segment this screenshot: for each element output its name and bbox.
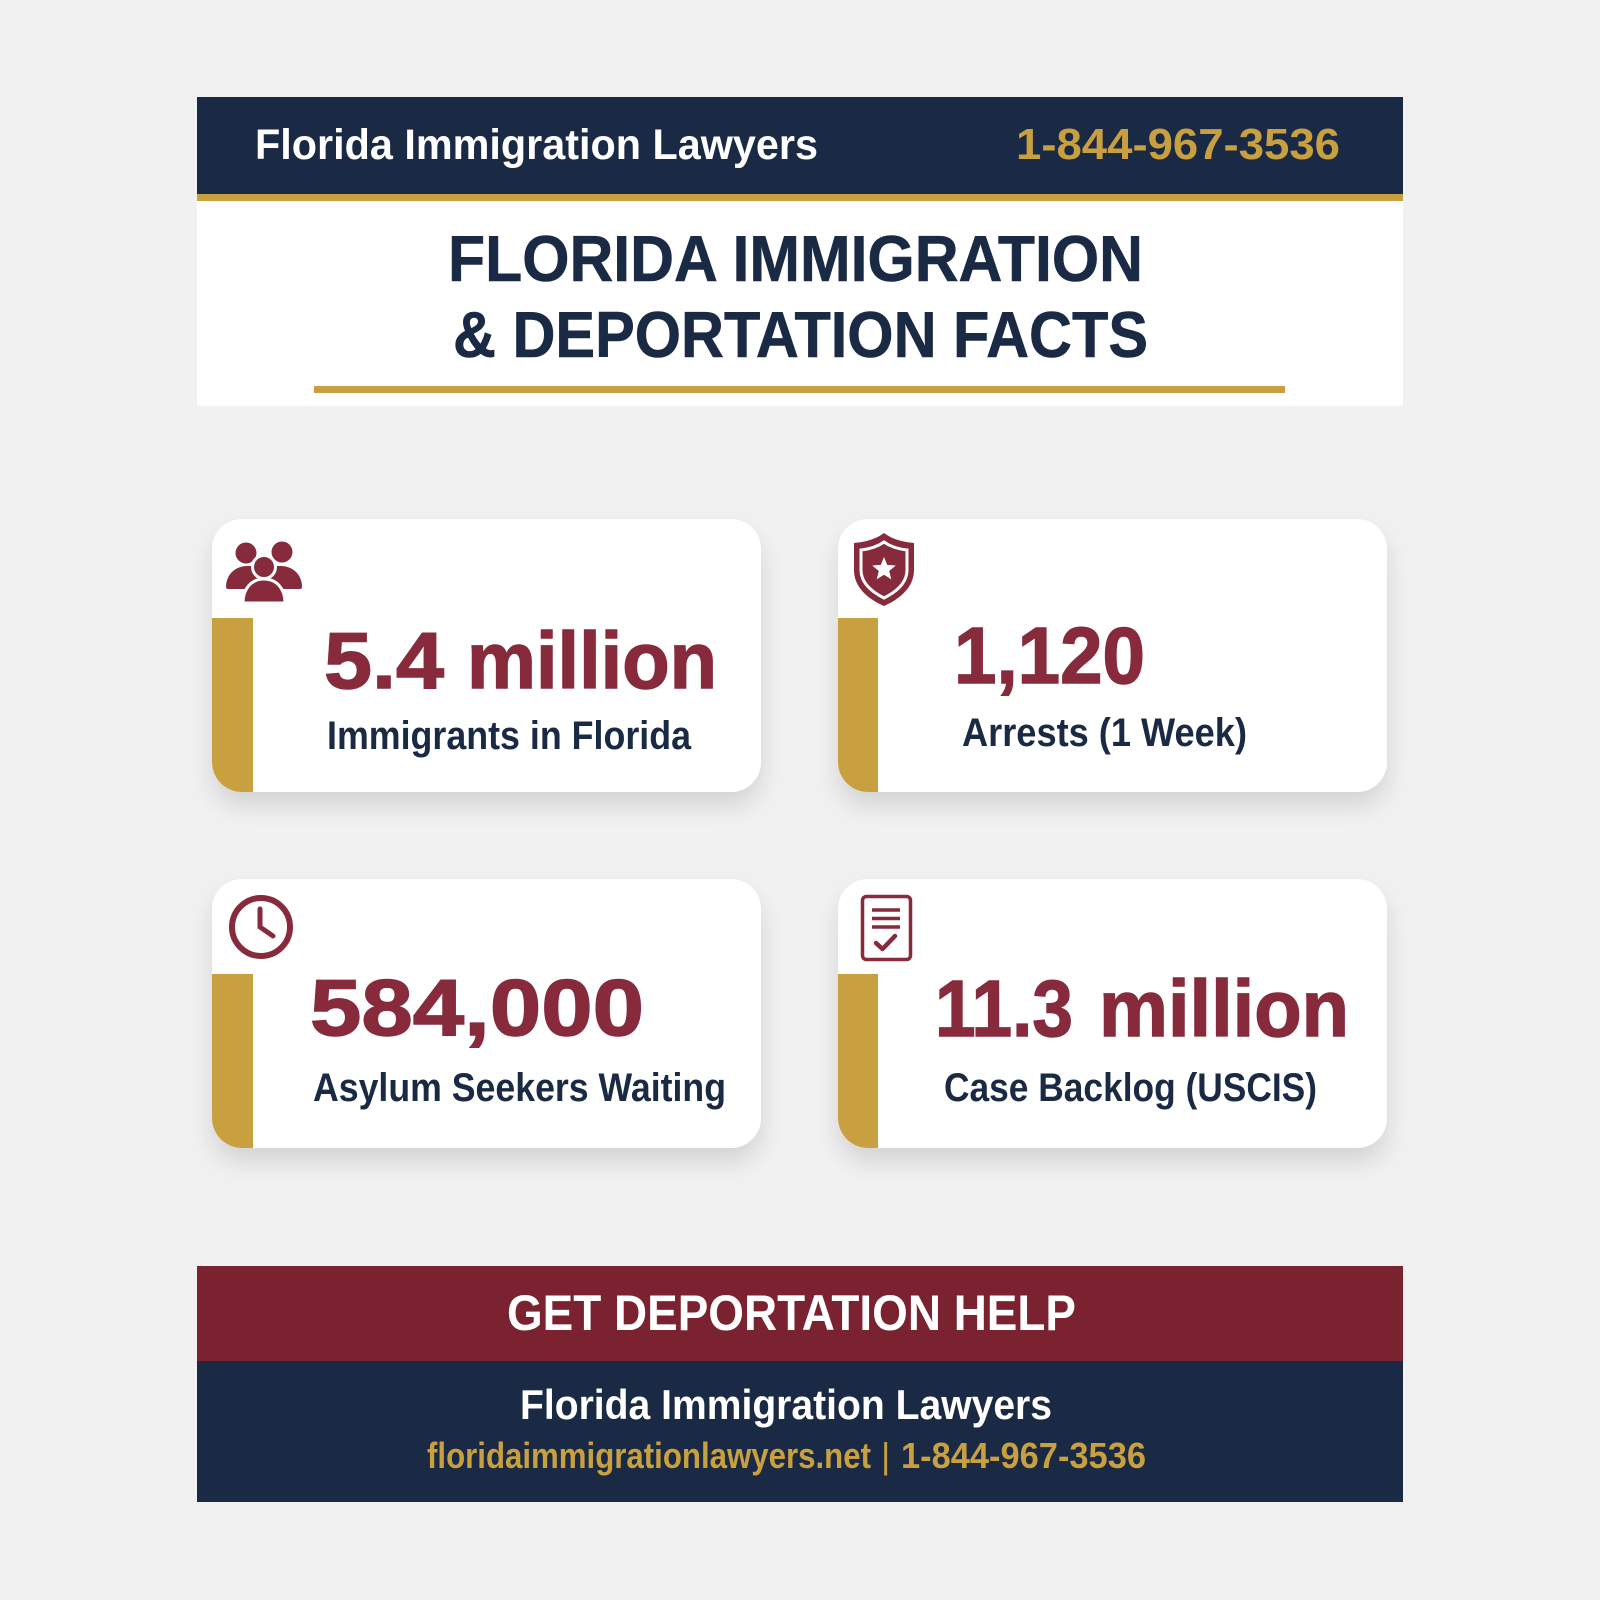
call to action heading: GET DEPORTATION HELP [507,1285,1076,1341]
statistic: 584,000 [310,963,644,1052]
statistic: 1,120 [954,611,1145,700]
panel: immigrants in Florida [212,519,761,792]
footer firm name: Florida Immigration Lawyers [520,1381,1052,1428]
icon: clock [232,898,290,956]
label: Asylum Seekers Waiting [313,1066,726,1110]
website and phone: 1-844-967-3536 [901,1435,1146,1476]
title underline [314,386,1285,393]
icon: shield [854,533,914,606]
title: FLORIDA IMMIGRATION [448,222,1143,295]
website and phone: floridaimmigrationlawyers.net [427,1435,871,1476]
phone number: 1-844-967-3536 [1016,120,1340,169]
title [448,222,1148,371]
statistic: million [467,616,717,705]
panel: asylum seekers [212,879,761,1148]
statistic: 11.3 [935,964,1073,1053]
website and phone: | [881,1435,890,1476]
icon: document with check [862,896,910,960]
call to action banner [197,1266,1403,1361]
statistic [324,616,717,705]
header panel [197,97,1403,406]
label: Arrests (1 Week) [962,711,1247,755]
title: & DEPORTATION FACTS [453,298,1148,371]
label: Case Backlog (USCIS) [944,1066,1317,1110]
label: Immigrants in Florida [327,714,692,758]
panel: arrests [838,519,1387,792]
statistic [935,964,1349,1053]
firm name: Florida Immigration Lawyers [255,121,818,169]
footer contact panel [197,1361,1403,1502]
statistic: 5.4 [324,616,445,705]
panel: case backlog [838,879,1387,1148]
statistic: million [1099,964,1349,1053]
icon: people [226,542,302,603]
